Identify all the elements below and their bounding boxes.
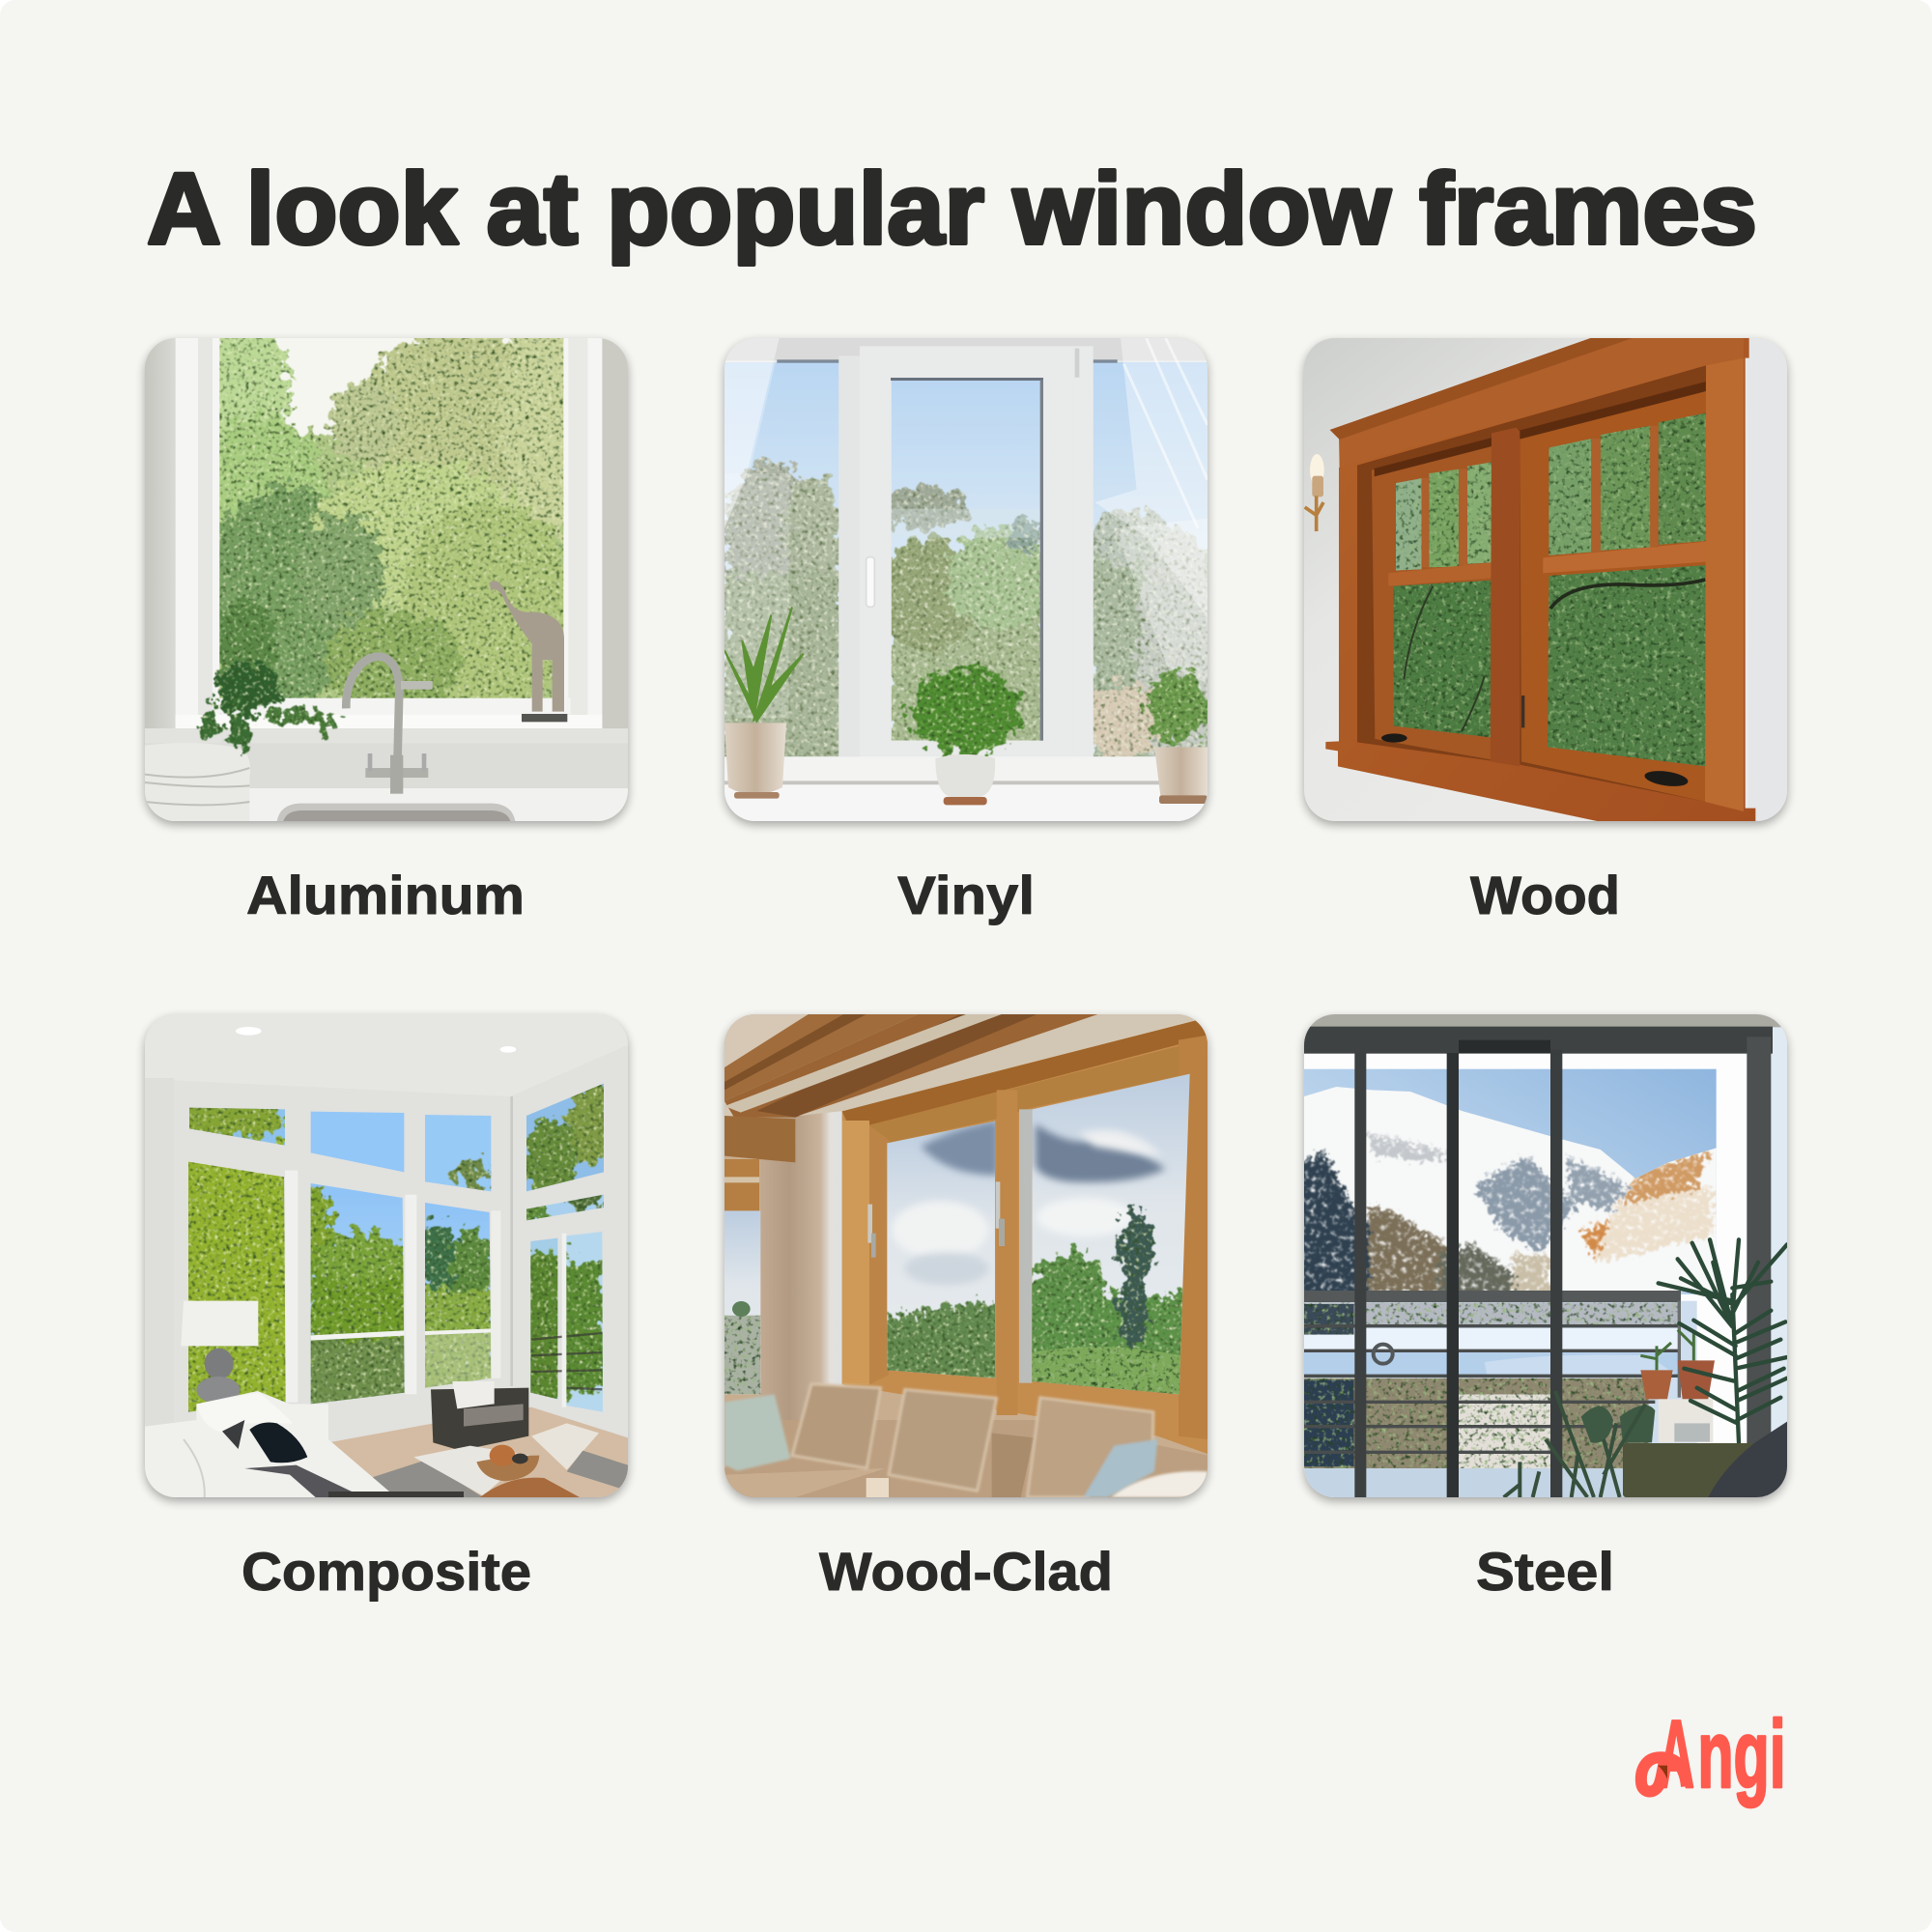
wood surround (1325, 338, 1755, 821)
steel mullions (1354, 1053, 1366, 1497)
table lamp (181, 1301, 258, 1404)
center plant and pot (910, 668, 1022, 755)
window handles (867, 1205, 872, 1243)
sofa (145, 1391, 464, 1497)
label: Wood-Clad: Wood-Clad (819, 1541, 1113, 1602)
side window (724, 1210, 760, 1394)
plates (145, 743, 250, 821)
glass panes (1394, 412, 1706, 766)
sink (277, 804, 515, 821)
logo: Angi (1634, 1701, 1786, 1808)
title: A look at popular window frames (147, 153, 1757, 266)
panel: Wood-Clad (724, 1014, 1208, 1501)
trailing plant (202, 664, 335, 751)
steel top frame (1304, 1014, 1787, 1027)
coffee table and bowl (413, 1445, 580, 1497)
crank handles (1381, 733, 1407, 743)
label: Composite: Composite (242, 1541, 531, 1602)
right plant and pot (1145, 671, 1209, 742)
photo: Aluminum kitchen window (145, 338, 628, 821)
panel: Vinyl (722, 338, 1214, 825)
photo: Wood-clad window with sofa (724, 1014, 1208, 1497)
ceiling beams (724, 1014, 918, 1101)
faucet (342, 652, 404, 755)
central mullion (1491, 428, 1520, 766)
label: Vinyl: Vinyl (897, 865, 1035, 925)
panel: Composite (145, 1014, 628, 1501)
balcony rails (1304, 1291, 1681, 1302)
snowy mountain (1304, 1087, 1717, 1292)
muntins (1388, 562, 1492, 586)
dark sofa (1708, 1422, 1787, 1497)
sofa (724, 1420, 1208, 1497)
tall palm plant (1659, 1239, 1787, 1442)
glass lower tint and rails (425, 1330, 491, 1388)
elephant ornament (490, 581, 564, 712)
label: Wood: Wood (1470, 865, 1620, 925)
label: Aluminum: Aluminum (246, 865, 525, 925)
photo: Vinyl window with plants (724, 338, 1208, 821)
photo: Composite windows living room (145, 1015, 628, 1497)
window glass (887, 1122, 995, 1378)
frames (777, 359, 838, 363)
potted plants (1640, 1370, 1673, 1399)
left plant and pot (724, 607, 804, 722)
wall sconce (1305, 454, 1324, 531)
olive armchair (1623, 1443, 1758, 1497)
sky panes (311, 1112, 404, 1172)
cushions (724, 1384, 1208, 1497)
lower valley (1304, 1301, 1697, 1468)
panel: Aluminum (145, 309, 628, 825)
sheer curtains (724, 338, 780, 528)
photo: Wood double window (1304, 338, 1787, 821)
logo: Angi: A (1659, 1701, 1694, 1808)
wood frame (842, 1017, 1208, 1454)
armchair (431, 1381, 528, 1451)
photo: Steel window with mountain view (1304, 1014, 1787, 1497)
panel: Wood (1304, 338, 1787, 825)
panel: Steel (1297, 1014, 1787, 1501)
right post (1705, 358, 1744, 811)
floor (328, 1407, 628, 1497)
label: Steel: Steel (1476, 1541, 1614, 1602)
floor plants (1581, 1406, 1613, 1443)
